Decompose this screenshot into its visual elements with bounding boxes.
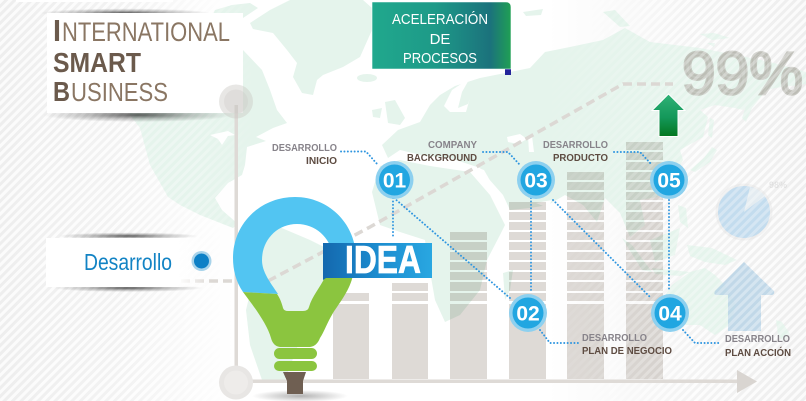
pie chart 98%: 98% (769, 180, 787, 190)
step 03 (517, 161, 555, 199)
stripe overlay (626, 50, 802, 379)
world map (130, 0, 806, 380)
label: desarrollo plan accion: PLAN ACCIÓN (725, 346, 791, 359)
IDEA ribbon: IDEA (345, 239, 421, 282)
step 03: 03 (524, 170, 548, 192)
label: company background (407, 139, 477, 164)
panel: desarrollo (46, 232, 212, 292)
dashed trend line (181, 84, 673, 281)
bar chart (333, 142, 663, 379)
step 02: 02 (516, 302, 540, 326)
label: desarrollo plan de negocio: PLAN DE NEGOCIO (582, 345, 672, 357)
pie chart 98% (716, 180, 787, 240)
label: company background: BACKGROUND (407, 152, 477, 164)
panel: company title: USINESS (71, 77, 168, 107)
percentage 99%: 99% (682, 40, 803, 107)
label: desarrollo inicio: DESARROLLO (272, 142, 337, 154)
step 01: 01 (383, 170, 406, 192)
panel: desarrollo: Desarrollo (84, 249, 172, 275)
dotted connectors (341, 152, 721, 343)
panel: aceleracion de procesos: DE (430, 31, 450, 48)
panel: aceleracion de procesos: ACELERACIÓN (392, 11, 488, 28)
label: company background: COMPANY (428, 139, 477, 151)
panel: company title: B (53, 76, 70, 107)
step 04: 04 (658, 302, 682, 326)
panel: company title: I (53, 13, 61, 48)
map inland seas (210, 78, 552, 208)
label: desarrollo producto: DESARROLLO (543, 139, 608, 151)
icon: blue up arrow (714, 262, 774, 331)
icon: light bulb (233, 197, 356, 401)
panel: aceleracion de procesos: PROCESOS (403, 50, 477, 67)
chart axes with arrow (219, 84, 757, 400)
step 01 (376, 161, 414, 199)
label: desarrollo producto: PRODUCTO (553, 152, 608, 164)
step 04 (651, 294, 689, 332)
step 05: 05 (657, 170, 681, 192)
label: desarrollo producto (543, 139, 608, 164)
label: desarrollo plan de negocio (582, 332, 672, 357)
panel: company title: SMART (53, 47, 141, 78)
panel: company title (47, 13, 243, 113)
label: desarrollo inicio (272, 142, 337, 167)
label: desarrollo plan de negocio: DESARROLLO (582, 332, 647, 344)
panel: company title: NTERNATIONAL (62, 17, 230, 47)
title shadows (16, 0, 233, 122)
step 05 (650, 161, 688, 199)
panel: aceleracion de procesos (372, 2, 511, 75)
label: desarrollo plan accion: DESARROLLO (725, 333, 790, 345)
icon: green up arrow (652, 94, 685, 136)
label: desarrollo inicio: INICIO (306, 155, 337, 167)
label: desarrollo plan accion (725, 333, 791, 359)
step 02 (509, 294, 547, 332)
